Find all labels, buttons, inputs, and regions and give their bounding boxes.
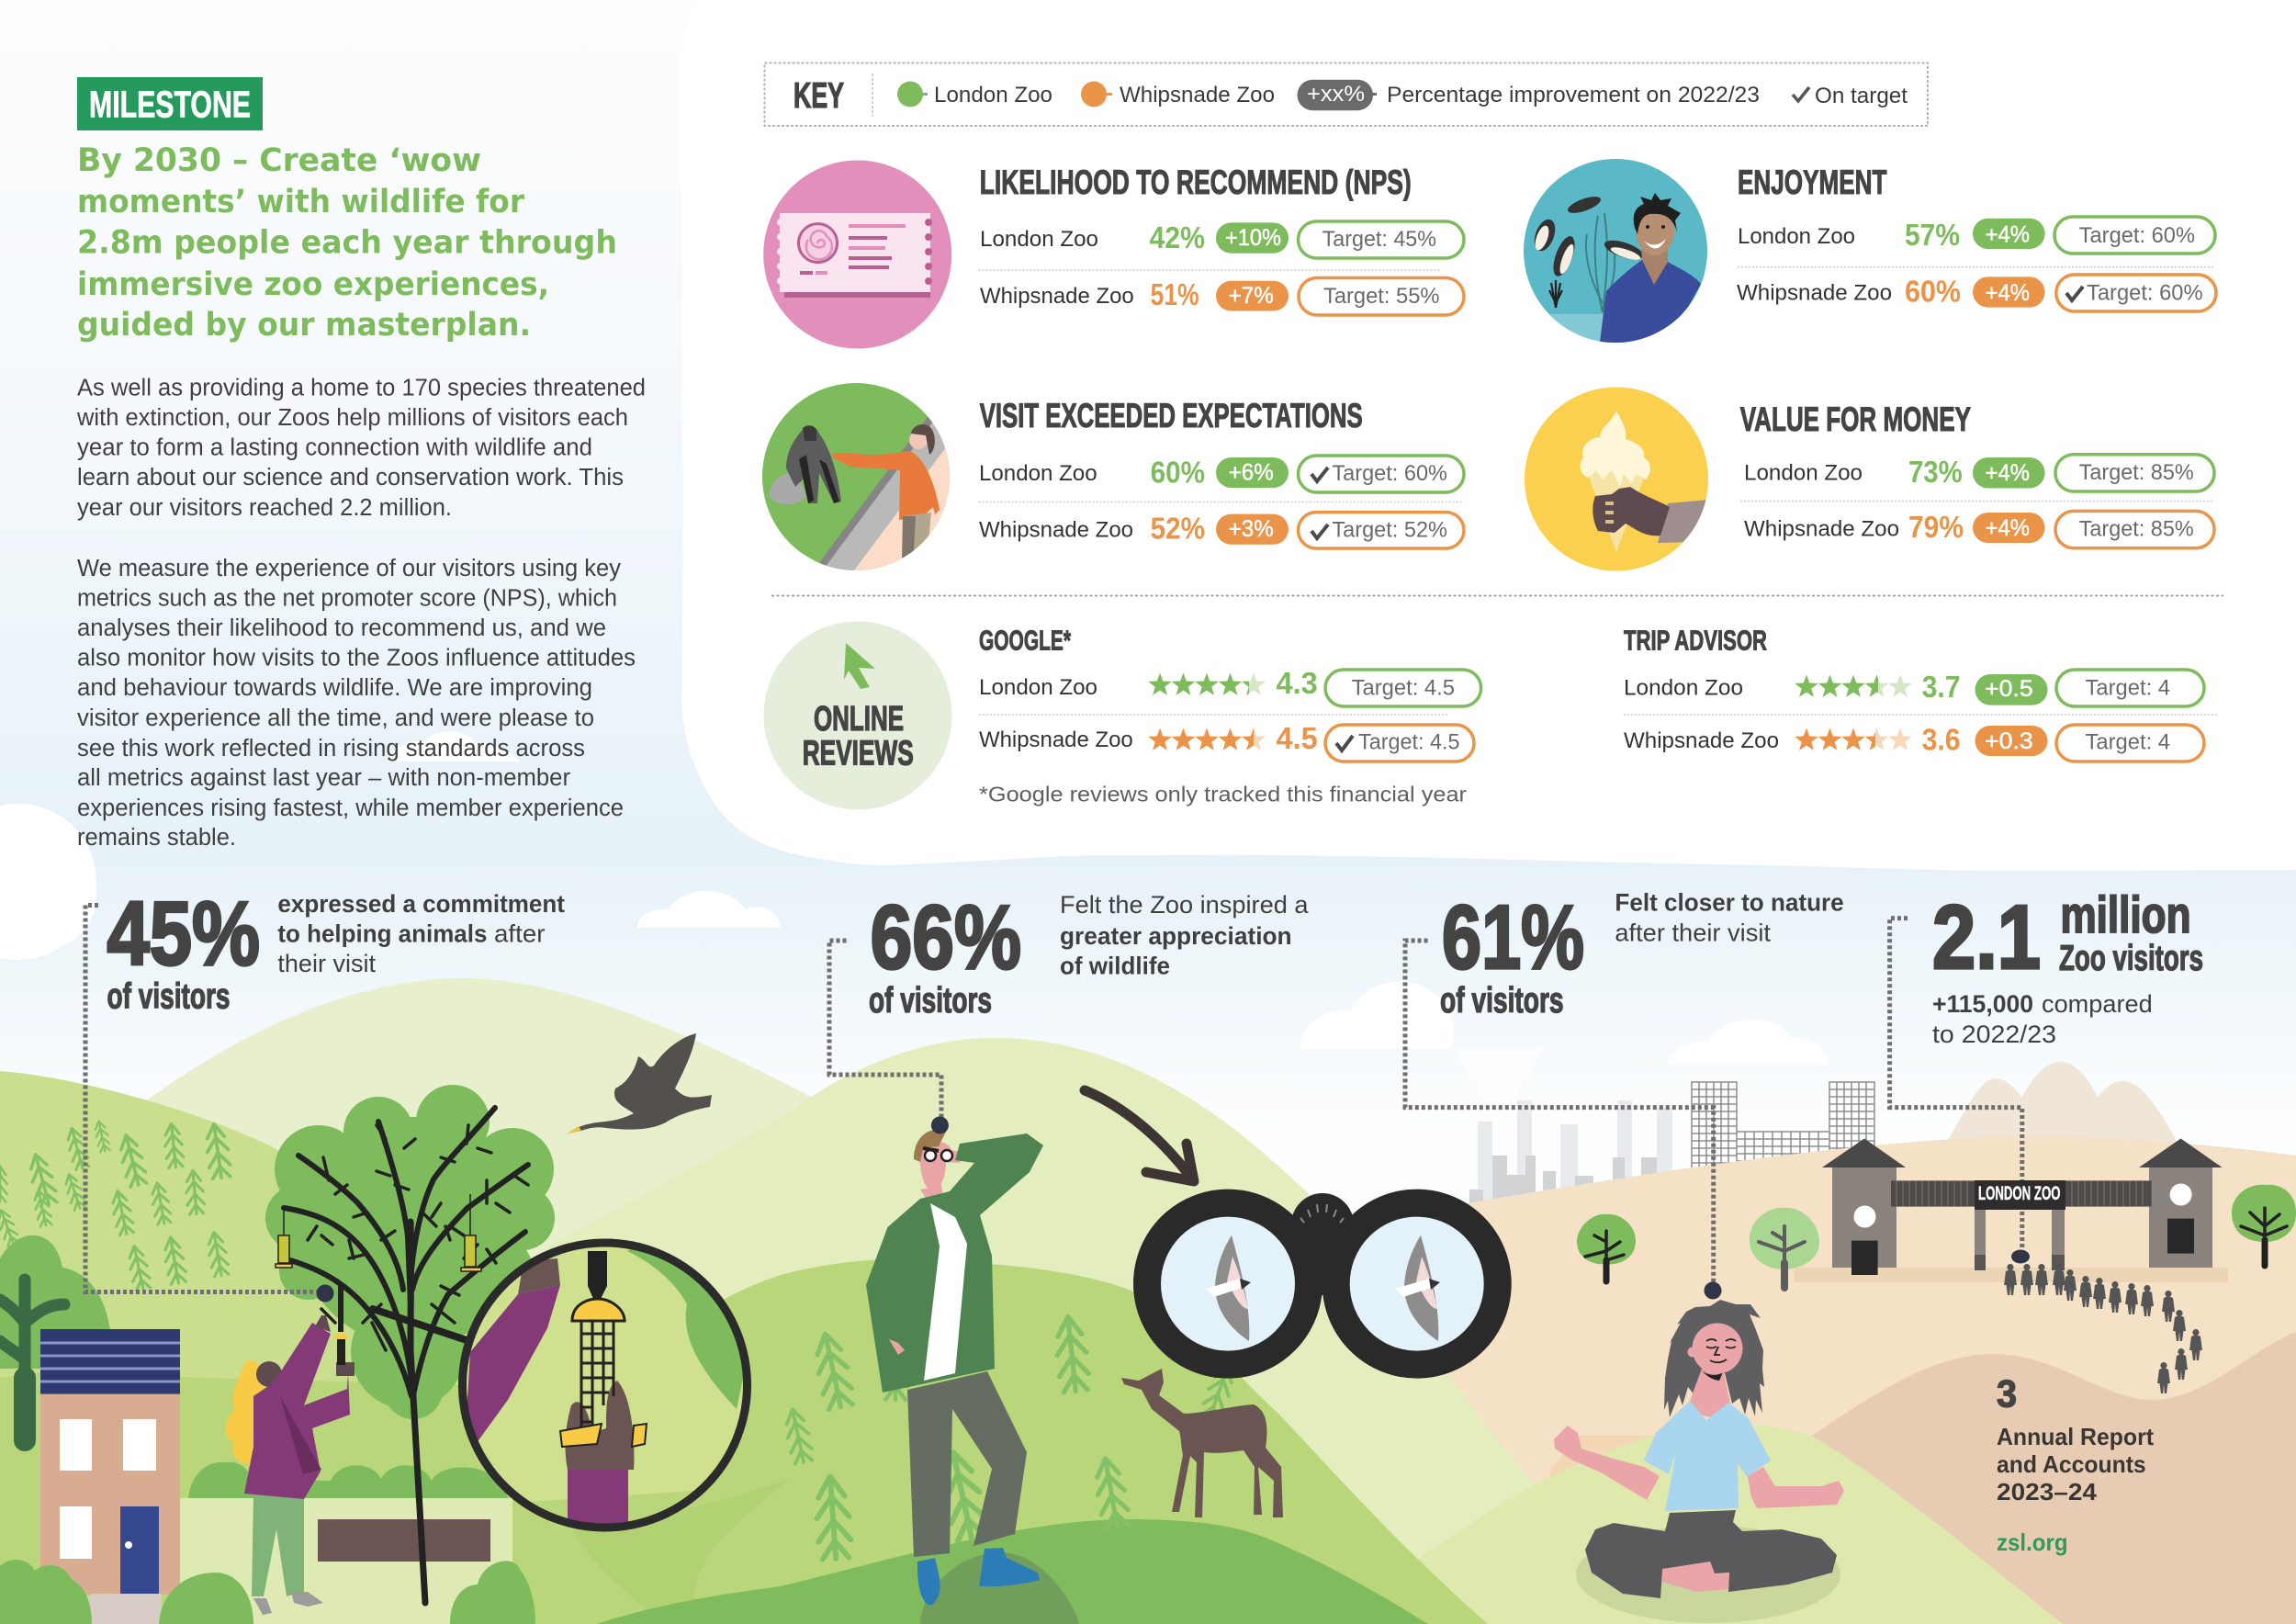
panel: likelihood to recommend: London Zoo [980, 227, 1098, 252]
panel: value for money: Target: 85% [2079, 517, 2194, 542]
panel: value for money: +4% [1986, 460, 2030, 486]
stat: 2.1 million zoo visitors: to 2022/23 [1932, 1021, 2056, 1048]
stat: 61 percent: of visitors [1440, 981, 1564, 1021]
icon: penguins and keeper [1524, 159, 1707, 343]
milestone headline: guided by our masterplan. [77, 307, 531, 344]
illustration: house [40, 1329, 180, 1624]
panel: trip advisor reviews: 3.6 [1922, 723, 1961, 757]
panel: likelihood to recommend: 42% [1150, 220, 1205, 254]
panel: visit exceeded expectations: +3% [1229, 516, 1274, 542]
illustration: dark tree and bush behind house [0, 1235, 112, 1440]
white data panel background [681, 0, 2296, 871]
panel: trip advisor reviews: +0.3 [1985, 728, 2033, 754]
stat: 45 percent: expressed a commitment [277, 890, 565, 918]
clouds [0, 731, 1828, 1111]
panel: visit exceeded expectations: London Zoo [979, 461, 1097, 486]
stat: 45 percent: after [494, 920, 546, 948]
icon: online reviews [764, 621, 951, 810]
stat: 45 percent: to helping animals [277, 920, 487, 948]
illustration: london zoo gate: LONDON ZOO [1978, 1183, 2061, 1204]
heading: milestone tag: MILESTONE [89, 83, 251, 125]
panel: google reviews [979, 625, 1481, 806]
panel: enjoyment: 57% [1905, 218, 1960, 252]
key legend: KEY [793, 76, 844, 116]
icon: ice cream [1525, 388, 1708, 571]
measuring experience body text: We measure the experience of our visitors using key [77, 556, 621, 581]
panel: trip advisor reviews: TRIP ADVISOR [1624, 625, 1767, 657]
panel: google reviews: 4.5 [1277, 721, 1318, 755]
panel: likelihood to recommend [979, 164, 1464, 315]
page footer: report info: Annual Report [1997, 1423, 2154, 1450]
measuring experience body text: analyses their likelihood to recommend us, and we [77, 615, 606, 641]
panel: visit exceeded expectations: 60% [1151, 456, 1205, 490]
panel: google reviews: Whipsnade Zoo [979, 727, 1133, 752]
key legend: Whipsnade Zoo [1120, 83, 1275, 107]
stat: 2.1 million zoo visitors: million [2061, 885, 2191, 943]
icon: online reviews: ONLINE [814, 700, 904, 739]
panel: trip advisor reviews [1624, 625, 2219, 761]
measuring experience body text: metrics such as the net promoter score (NPS), which [77, 586, 617, 612]
panel: visit exceeded expectations: VISIT EXCEEDED EXPECTATIONS [980, 397, 1363, 434]
panel: visit exceeded expectations: +6% [1229, 459, 1274, 485]
panel: enjoyment: London Zoo [1738, 224, 1855, 249]
panel: value for money: Target: 85% [2079, 460, 2194, 485]
illustration: person with feeder [226, 1284, 355, 1615]
illustration: london zoo gate [1795, 1139, 2228, 1282]
panel: google reviews: GOOGLE* [979, 625, 1072, 657]
panel: value for money: Whipsnade Zoo [1744, 517, 1899, 542]
panel: trip advisor reviews: Target: 4 [2085, 730, 2170, 755]
panel: visit exceeded expectations: Target: 52% [1332, 518, 1447, 542]
panel: visit exceeded expectations: Whipsnade Zoo [979, 518, 1133, 542]
measuring experience body text: visitor experience all the time, and were please to [77, 705, 594, 731]
milestone headline: immersive zoo experiences, [77, 266, 549, 303]
panel: trip advisor reviews: +0.5 [1985, 676, 2033, 702]
stat: 66 percent [829, 886, 1309, 1119]
panel: enjoyment: 60% [1905, 275, 1961, 309]
stat: 66 percent: of wildlife [1060, 953, 1170, 980]
panel: likelihood to recommend: +10% [1225, 225, 1281, 251]
beige hills [1378, 1136, 2296, 1624]
milestone headline [77, 142, 617, 344]
measuring experience body text: remains stable. [77, 825, 236, 851]
illustration: magnifier on feeder [459, 1231, 762, 1543]
stat: 2.1 million zoo visitors: compared [2042, 990, 2153, 1018]
distant mountains [1938, 1062, 2186, 1157]
panel: enjoyment: Target: 60% [2087, 281, 2203, 306]
panel: likelihood to recommend: Target: 45% [1322, 227, 1436, 252]
panel: enjoyment: ENJOYMENT [1738, 164, 1887, 201]
illustration: binoculars with bird [1147, 1193, 1498, 1365]
illustration: deer [1121, 1369, 1283, 1517]
milestone headline: 2.8m people each year through [77, 224, 617, 261]
panel: enjoyment: Target: 60% [2079, 223, 2195, 248]
panel: google reviews: Target: 4.5 [1358, 730, 1460, 755]
stat: 66 percent: greater appreciation [1060, 922, 1292, 950]
panel: likelihood to recommend: LIKELIHOOD TO RECOMMEND (NPS) [980, 164, 1412, 201]
icon: gorilla and visitor [762, 383, 950, 570]
panel: google reviews: *Google reviews only tracked this financial year [979, 783, 1467, 806]
stat: 2.1 million zoo visitors [1890, 885, 2203, 1251]
stat: 66 percent: of visitors [869, 981, 992, 1021]
panel: likelihood to recommend: Whipsnade Zoo [980, 284, 1134, 309]
key legend [764, 62, 1928, 126]
measuring experience body text: all metrics against last year – with non-member [77, 765, 571, 791]
measuring experience body text: also monitor how visits to the Zoos influence attitudes [77, 645, 636, 671]
measuring experience body text: and behaviour towards wildlife. We are improving [77, 675, 592, 701]
distant city skyline [1469, 1082, 1874, 1204]
panel: enjoyment: +4% [1986, 280, 2030, 306]
page footer: report info: zsl.org [1997, 1528, 2068, 1556]
panel: google reviews: 4.3 [1277, 666, 1318, 700]
measuring experience body text: see this work reflected in rising standards across [77, 736, 585, 761]
key legend: Percentage improvement on 2022/23 [1387, 83, 1760, 107]
panel: likelihood to recommend: 51% [1151, 277, 1199, 311]
illustration: garden with hedge and bench [0, 1462, 535, 1624]
illustration: queue of visitors [2004, 1264, 2202, 1393]
intro body text: year our visitors reached 2.2 million. [77, 495, 452, 521]
milestone headline: moments’ with wildlife for [77, 184, 525, 220]
illustration: flying bird [566, 1033, 712, 1134]
intro body text: with extinction, our Zoos help millions of visitors each [76, 405, 628, 431]
panel: trip advisor reviews: Whipsnade Zoo [1624, 728, 1779, 753]
panel: likelihood to recommend: +7% [1229, 283, 1274, 309]
panel: enjoyment [1737, 164, 2216, 311]
intro body text: learn about our science and conservation work. This [77, 465, 624, 491]
stat: 45 percent: 45% [107, 883, 260, 984]
page footer: report info: 2023–24 [1997, 1478, 2098, 1506]
illustration: man scratching head [866, 1117, 1043, 1605]
stat: 45 percent [85, 883, 565, 1291]
panel: enjoyment: +4% [1986, 221, 2030, 247]
panel: trip advisor reviews: London Zoo [1624, 676, 1743, 701]
illustration: tree with bird feeders [265, 1085, 555, 1603]
panel: visit exceeded expectations: Target: 60% [1332, 461, 1447, 486]
green hills [0, 978, 2063, 1624]
illustration: small trees [1577, 1185, 2296, 1288]
stat: 66 percent: 66% [871, 886, 1021, 987]
panel: value for money: VALUE FOR MONEY [1740, 400, 1971, 438]
key legend: On target [1815, 84, 1908, 108]
stat: 61 percent: Felt closer to nature [1615, 889, 1844, 917]
stat: 66 percent: Felt the Zoo inspired a [1060, 891, 1309, 919]
icon: ticket [763, 160, 951, 349]
panel: trip advisor reviews: 3.7 [1922, 670, 1961, 704]
measuring experience body text [77, 556, 636, 851]
panel: google reviews: Target: 4.5 [1352, 676, 1455, 701]
heading: milestone tag [77, 77, 263, 130]
stat: 45 percent: of visitors [107, 977, 230, 1017]
measuring experience body text: experiences rising fastest, while member experience [77, 795, 624, 821]
stat: 61 percent: after their visit [1615, 919, 1771, 947]
intro body text [76, 375, 646, 521]
key legend: London Zoo [934, 83, 1052, 107]
stat: 2.1 million zoo visitors: Zoo visitors [2059, 939, 2203, 978]
panel: visit exceeded expectations [979, 397, 1464, 548]
panel: value for money: +4% [1986, 515, 2030, 541]
pine trees [0, 1120, 1238, 1560]
page footer: report info: 3 [1997, 1372, 2017, 1415]
page footer: report info: and Accounts [1997, 1450, 2146, 1478]
panel: visit exceeded expectations: 52% [1151, 511, 1205, 546]
panel: trip advisor reviews: Target: 4 [2085, 676, 2170, 701]
arrow to binoculars [1085, 1090, 1194, 1181]
intro body text: As well as providing a home to 170 species threatened [77, 375, 646, 400]
panel: google reviews: London Zoo [979, 675, 1097, 700]
panel: enjoyment: Whipsnade Zoo [1737, 281, 1892, 306]
stat: 2.1 million zoo visitors: +115,000 [1932, 990, 2033, 1018]
panel: value for money [1740, 400, 2214, 548]
stat: 61 percent [1405, 886, 1844, 1284]
page footer: report info [1997, 1372, 2154, 1556]
milestone headline: By 2030 – Create ‘wow [77, 142, 481, 179]
panel: likelihood to recommend: Target: 55% [1323, 284, 1440, 309]
intro body text: year to form a lasting connection with wildlife and [77, 435, 592, 461]
icon: online reviews: REVIEWS [803, 735, 914, 773]
illustration: meditating woman [1554, 1282, 1844, 1623]
key legend: +xx% [1307, 82, 1365, 107]
panel: value for money: London Zoo [1744, 460, 1863, 485]
stat: 61 percent: 61% [1442, 886, 1584, 987]
stat: 45 percent: their visit [277, 950, 376, 977]
panel: value for money: 73% [1908, 455, 1963, 489]
panel: value for money: 79% [1908, 510, 1964, 544]
stat: 2.1 million zoo visitors: 2.1 [1932, 886, 2041, 987]
